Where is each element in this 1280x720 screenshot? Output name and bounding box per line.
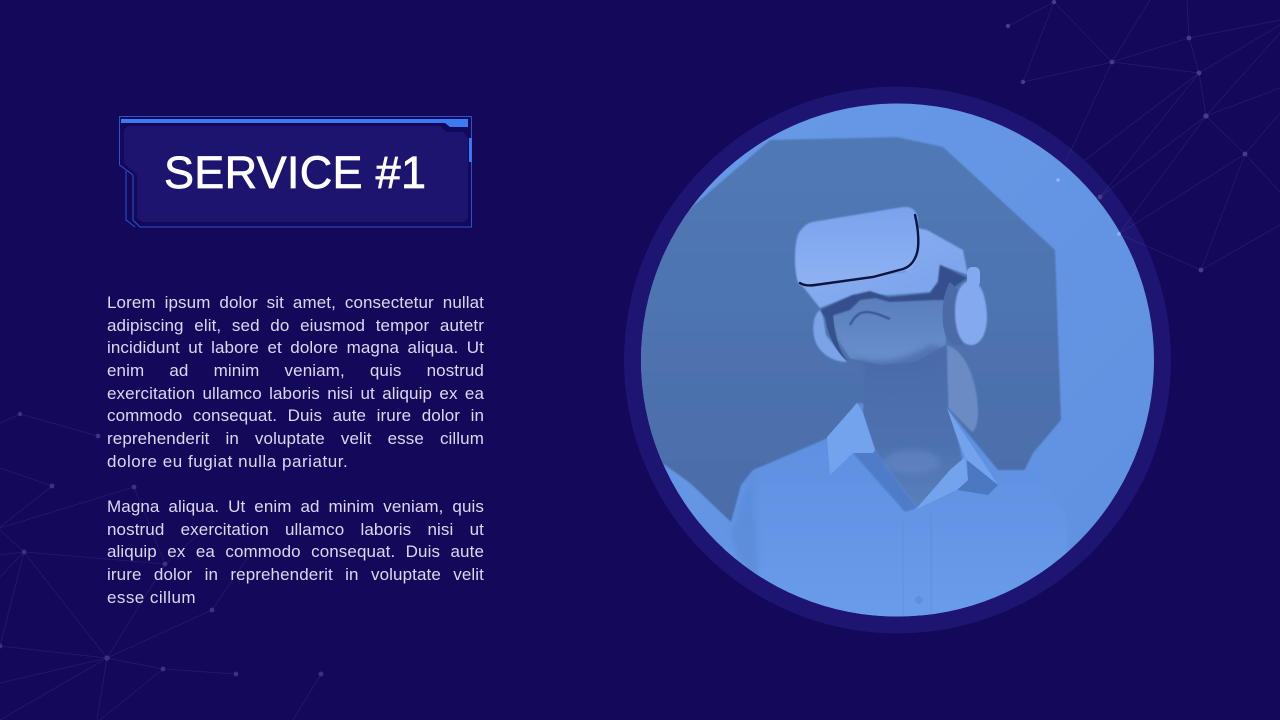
headphone nub	[967, 267, 980, 287]
photo ring	[624, 86, 1171, 634]
body text: adipiscing elit, sed do eiusmod tempor autetr	[107, 316, 484, 335]
body text: aliquip ex ea commodo consequat. Duis aute	[107, 542, 484, 561]
darker recessed wall	[630, 137, 1061, 530]
headphone pad	[942, 282, 962, 342]
body text: esse cillum	[107, 588, 196, 607]
button placket	[902, 536, 932, 616]
visor black seam	[800, 215, 918, 285]
neck	[862, 402, 963, 508]
banner inner left line	[126, 171, 135, 227]
right collar	[947, 408, 998, 485]
banner inner panel	[124, 126, 468, 222]
left ear cup	[813, 309, 847, 362]
body text: enim ad minim veniam, quis nostrud	[107, 361, 484, 380]
shirt placket shadow	[853, 450, 917, 512]
photo backdrop wall	[640, 100, 1156, 620]
face	[833, 294, 946, 364]
headset gasket	[820, 265, 967, 318]
body text: exercitation ullamco laboris nisi ut aliquip ex ea	[107, 384, 484, 403]
mouth	[850, 312, 890, 325]
network nodes: bottom left	[0, 412, 323, 676]
banner outline	[120, 116, 472, 227]
right collar shadow	[957, 460, 998, 495]
body text: incididunt ut labore et dolore magna aliqua. Ut	[107, 338, 484, 357]
network: bottom left	[0, 412, 323, 720]
neck highlight	[886, 452, 938, 472]
network nodes: top right	[1006, 0, 1247, 272]
body text: irure dolor in reprehenderit in voluptate velit	[107, 565, 484, 584]
body text: dolore eu fugiat nulla pariatur.	[107, 452, 348, 471]
shirt	[724, 402, 1068, 616]
left headset strap	[826, 315, 848, 361]
shirt buttons	[915, 596, 923, 604]
shirt shading on the lower left	[733, 497, 756, 573]
body text: Lorem ipsum dolor sit amet, consectetur nullat	[107, 293, 484, 312]
hair ponytail	[947, 345, 978, 432]
body text: Magna aliqua. Ut enim ad minim veniam, quis	[107, 497, 484, 516]
body text: reprehenderit in voluptate velit esse cillum	[107, 429, 484, 448]
network: top right	[1006, 0, 1280, 272]
left collar	[827, 403, 875, 475]
banner right accent tab	[469, 138, 472, 162]
body text: nostrud exercitation ullamco laboris nisi ut	[107, 520, 484, 539]
photo: woman wearing a VR headset	[630, 100, 1156, 630]
chin shadow	[856, 344, 942, 366]
title banner	[120, 116, 472, 227]
network lines: bottom left	[0, 414, 321, 720]
body text: commodo consequat. Duis aute irure dolor in	[107, 406, 484, 425]
right collar flap	[915, 457, 968, 510]
network lines: top right	[1008, 0, 1280, 270]
headphone ear cup	[955, 281, 987, 345]
title: SERVICE #1	[164, 147, 426, 198]
body text	[107, 293, 484, 607]
banner top accent bar	[121, 119, 468, 127]
headset front visor	[795, 207, 918, 287]
headset body side	[800, 228, 968, 308]
